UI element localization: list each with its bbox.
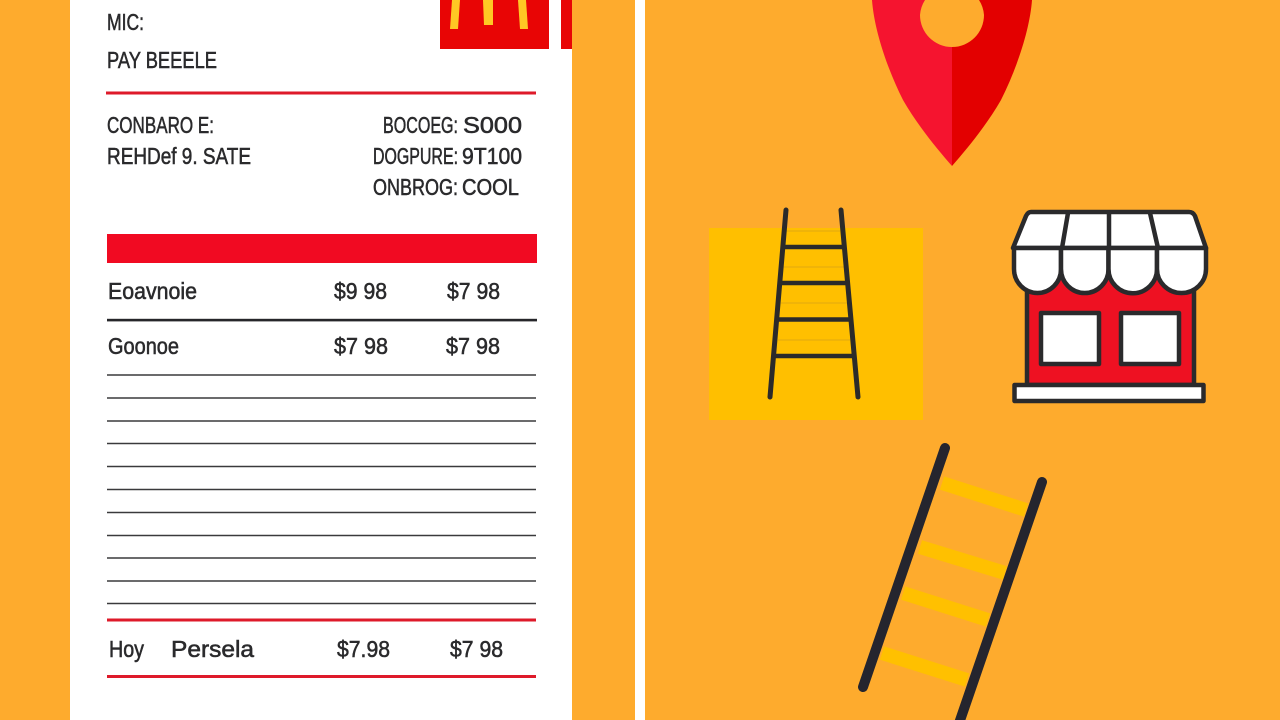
icon: logo block with arches [440, 0, 549, 49]
receipt heading [107, 9, 217, 73]
receipt details right: COOL [462, 174, 519, 200]
empty table rows [107, 375, 536, 604]
receipt details left [107, 112, 251, 169]
table header bar [107, 234, 537, 263]
table total row: $7.98 [337, 636, 390, 662]
receipt details right: S000 [463, 112, 522, 138]
table row 2 [108, 333, 500, 359]
receipt details right: BOCOEG: [383, 112, 458, 138]
receipt details right: ONBROG: [373, 174, 458, 200]
table total row: Hoy [109, 636, 144, 662]
table row 2: $7 98 [446, 333, 500, 359]
table row 2: $7 98 [334, 333, 388, 359]
table row 1: $9 98 [334, 278, 387, 304]
table total row [109, 636, 503, 662]
receipt details right: 9T100 [462, 143, 522, 169]
receipt details left: REHDef 9. SATE [107, 143, 251, 169]
table row 1: Eoavnoie [108, 278, 197, 304]
receipt heading: PAY BEEELE [107, 47, 217, 73]
table row 1 [108, 278, 500, 304]
icon: tilted ladder [863, 448, 1042, 720]
receipt details right: DOGPURE: [373, 143, 458, 169]
table total row: Persela [171, 636, 254, 662]
logo block edge [561, 0, 572, 49]
receipt details right [373, 112, 522, 200]
receipt heading: MIC: [107, 9, 144, 35]
icon: storefront [1013, 212, 1206, 401]
icon: ladder on yellow square [709, 210, 923, 420]
table row 2: Goonoe [108, 333, 179, 359]
table total row: $7 98 [450, 636, 503, 662]
table row 1: $7 98 [447, 278, 500, 304]
panel: receipt [70, 0, 572, 720]
icon: map pin [872, 0, 1032, 166]
receipt details left: CONBARO E: [107, 112, 214, 138]
